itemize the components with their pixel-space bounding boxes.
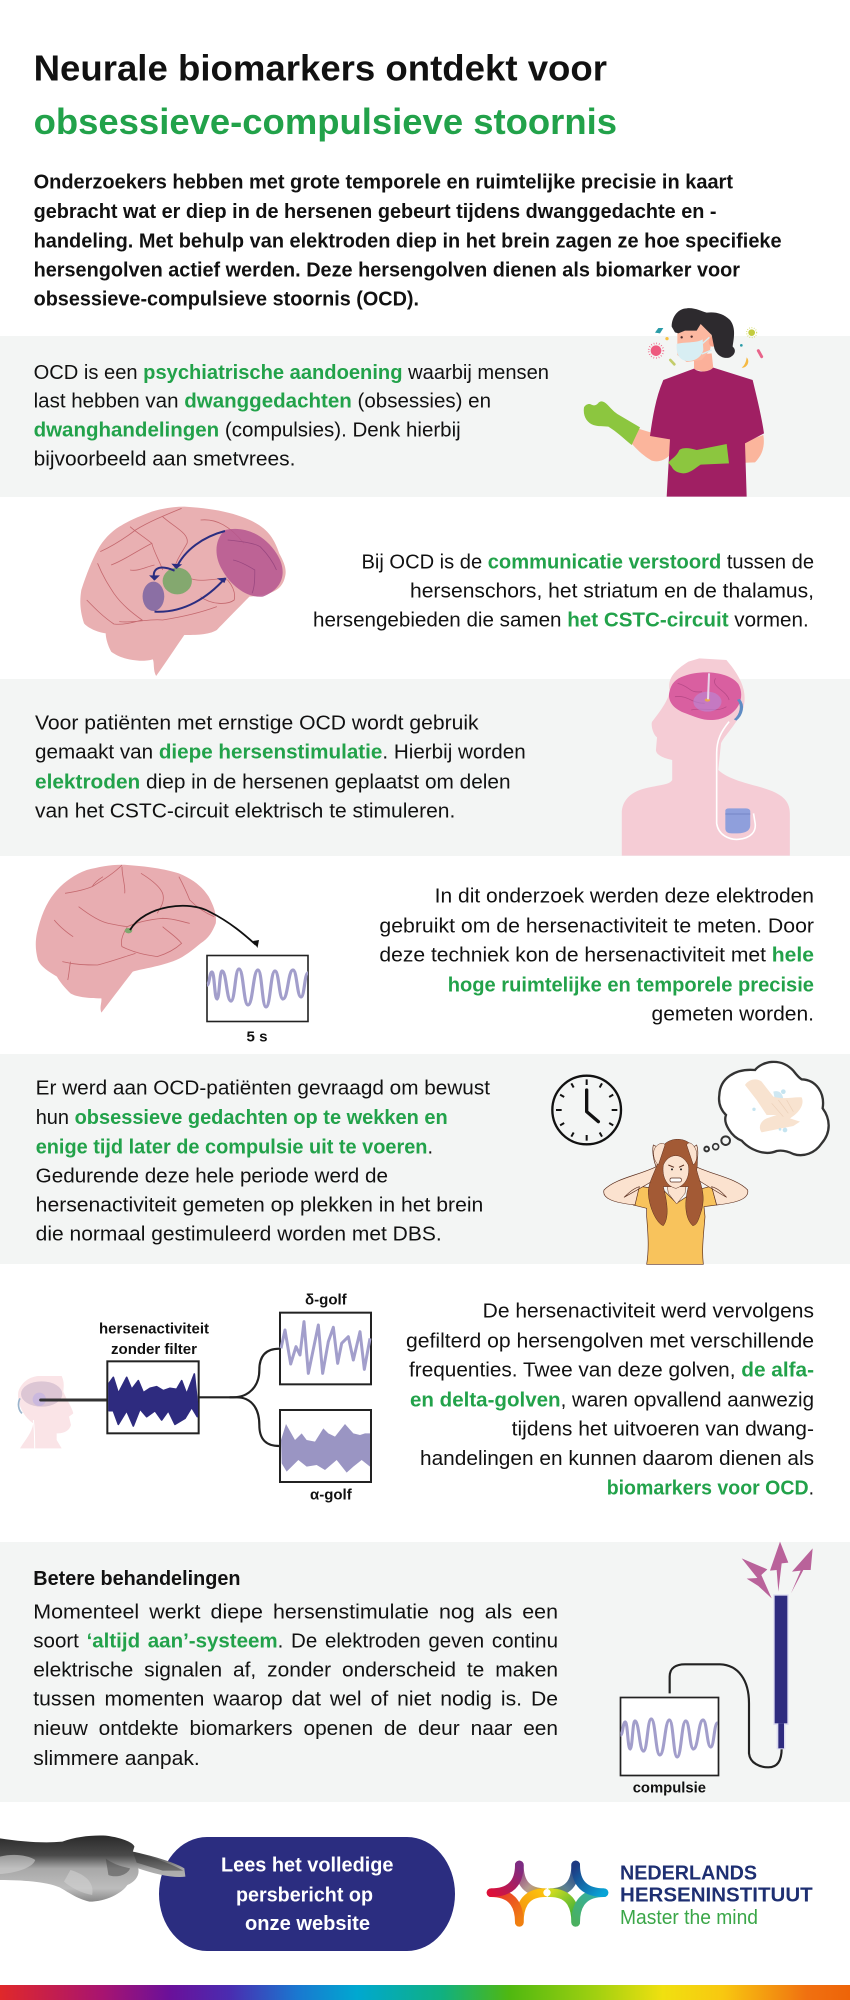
intro text: gebracht wat er diep in de hersenen gebeurt tijdens dwanggedachte en - — [34, 200, 717, 223]
text: experiment: enige tijd later de compulsie uit te voeren. — [36, 1135, 433, 1158]
text: filtering: biomarkers voor OCD. — [607, 1476, 814, 1499]
chart: delta wave — [280, 1291, 371, 1384]
text: measuring: hoge ruimtelijke en temporele precisie — [448, 973, 814, 996]
logo: Nederlands Herseninstituut: NEDERLANDS — [620, 1861, 757, 1884]
text: OCD definition: last hebben van dwanggedachten (obsessies) en — [34, 390, 491, 413]
icon: clock — [552, 1076, 621, 1144]
title: obsessieve-compulsieve stoornis — [34, 101, 617, 142]
text: filtering — [406, 1300, 814, 1499]
intro text: Onderzoekers hebben met grote temporele en ruimtelijke precisie in kaart — [34, 171, 733, 194]
text: treatments: Momenteel werkt diepe hersenstimulatie nog als een — [33, 1600, 558, 1623]
chart: unfiltered activity: zonder filter — [111, 1341, 197, 1358]
text: treatments: slimmere aanpak. — [33, 1747, 200, 1770]
chart: alpha wave: α-golf — [310, 1486, 353, 1503]
chart: alpha wave — [280, 1410, 371, 1503]
text: filtering: De hersenactiviteit werd vervolgens — [483, 1300, 814, 1323]
arrow: from brain to recording — [130, 906, 259, 948]
button: read the press release: persbericht op — [236, 1884, 373, 1907]
heading: better treatments: Betere behandelingen — [33, 1567, 240, 1590]
icon: brain with recording arrow — [36, 865, 216, 1013]
text: filtering: handelingen en kunnen daarom dienen als — [420, 1447, 814, 1470]
chart: unfiltered activity — [99, 1320, 209, 1433]
text: CSTC explanation: hersenschors, het striatum en de thalamus, — [410, 580, 814, 603]
icon: small head with electrode — [18, 1376, 73, 1448]
text: CSTC explanation — [313, 550, 814, 632]
text: treatments — [33, 1600, 558, 1770]
text: OCD definition: dwanghandelingen (compulsies). Denk hierbij — [34, 419, 461, 442]
panel: experiment — [0, 1054, 850, 1264]
button: read the press release: Lees het volledige — [221, 1854, 394, 1877]
chart: recording trace — [207, 956, 308, 1046]
intro text: handeling. Met behulp van elektroden diep in het brein zagen ze hoe specifieke — [34, 229, 782, 252]
icon: thought bubble with washing hands — [704, 1062, 829, 1155]
panel: filtering brain waves — [18, 1291, 814, 1503]
text: experiment: Er werd aan OCD-patiënten gevraagd om bewust — [36, 1076, 490, 1099]
text: treatments: soort ‘altijd aan’-systeem. De elektroden geven continu — [33, 1629, 558, 1652]
text: CSTC explanation: Bij OCD is de communicatie verstoord tussen de — [362, 550, 814, 573]
icon: pointing hand — [0, 1836, 185, 1902]
text: treatments: nieuw ontdekte biomarkers openen de deur naar een — [33, 1717, 558, 1740]
icon: patient with implanted stimulator — [622, 658, 790, 856]
text: deep brain stimulation: van het CSTC-circuit elektrisch te stimuleren. — [35, 799, 455, 822]
text: experiment: die normaal gestimuleerd worden met DBS. — [36, 1223, 442, 1246]
intro text: hersengolven actief werden. Deze hersengolven dienen als biomarker voor — [34, 259, 740, 282]
text: deep brain stimulation — [35, 711, 526, 822]
text: measuring: deze techniek kon de hersenactiviteit met hele — [379, 944, 814, 967]
chart: delta wave: δ-golf — [305, 1291, 348, 1308]
text: deep brain stimulation: elektroden diep in de hersenen geplaatst om delen — [35, 770, 511, 793]
connector lines — [41, 1349, 279, 1446]
text: measuring: In dit onderzoek werden deze elektroden — [435, 885, 814, 908]
icon: woman with mask and gloves — [584, 308, 764, 497]
panel: what is OCD — [0, 308, 850, 497]
chart: recording trace: 5 s — [246, 1029, 268, 1046]
rainbow footer bar — [0, 1985, 850, 2000]
text: filtering: gefilterd op hersengolven met verschillende — [406, 1330, 814, 1353]
panel: better treatments — [0, 1542, 850, 1802]
text: deep brain stimulation: Voor patiënten met ernstige OCD wordt gebruik — [35, 711, 479, 734]
chart: unfiltered activity: hersenactiviteit — [99, 1320, 209, 1337]
icon: logo mark — [491, 1865, 604, 1922]
title: Neurale biomarkers ontdekt voor — [34, 48, 607, 89]
logo: Nederlands Herseninstituut: HERSENINSTITUUT — [620, 1884, 813, 1907]
intro text: obsessieve-compulsieve stoornis (OCD). — [34, 288, 419, 311]
button: read the press release — [159, 1837, 455, 1951]
text: OCD definition — [34, 361, 549, 471]
text: treatments: tussen momenten waarop dat wel of niet nodig is. De — [33, 1688, 558, 1711]
panel: deep brain stimulation — [0, 658, 850, 856]
icon: distressed woman — [604, 1139, 748, 1264]
button: read the press release: onze website — [245, 1912, 370, 1935]
text: filtering: tijdens het uitvoeren van dwang- — [512, 1418, 814, 1441]
logo: Nederlands Herseninstituut: Master the mind — [620, 1906, 758, 1929]
text: experiment: hersenactiviteit gemeten op plekken in het brein — [36, 1194, 483, 1217]
icon: electrode with sparks — [670, 1542, 813, 1767]
text: measuring: gebruikt om de hersenactiviteit te meten. Door — [379, 914, 814, 937]
text: experiment: Gedurende deze hele periode werd de — [36, 1164, 388, 1187]
intro text — [34, 171, 782, 311]
text: experiment: hun obsessieve gedachten op te wekken en — [36, 1106, 448, 1129]
text: filtering: en delta-golven, waren opvallend aanwezig — [410, 1389, 814, 1412]
text: measuring — [379, 885, 814, 1026]
chart: compulsion recording: compulsie — [633, 1779, 706, 1796]
text: measuring: gemeten worden. — [652, 1003, 814, 1026]
text: deep brain stimulation: gemaakt van diepe hersenstimulatie. Hierbij worden — [35, 741, 526, 764]
panel: CSTC circuit — [80, 507, 814, 676]
chart: compulsion recording — [620, 1698, 718, 1796]
title — [34, 48, 617, 142]
text: experiment — [36, 1076, 490, 1246]
logo: Nederlands Herseninstituut — [491, 1861, 813, 1929]
text: OCD definition: OCD is een psychiatrische aandoening waarbij mensen — [34, 361, 549, 384]
text: CSTC explanation: hersengebieden die samen het CSTC-circuit vormen. — [313, 609, 809, 632]
text: OCD definition: bijvoorbeeld aan smetvrees. — [34, 448, 295, 471]
panel: measuring brain activity — [36, 865, 814, 1046]
text: treatments: elektrische signalen af, zonder onderscheid te maken — [33, 1659, 558, 1682]
text: filtering: frequenties. Twee van deze golven, de alfa- — [409, 1359, 814, 1382]
icon: brain with CSTC circuit — [80, 507, 286, 676]
